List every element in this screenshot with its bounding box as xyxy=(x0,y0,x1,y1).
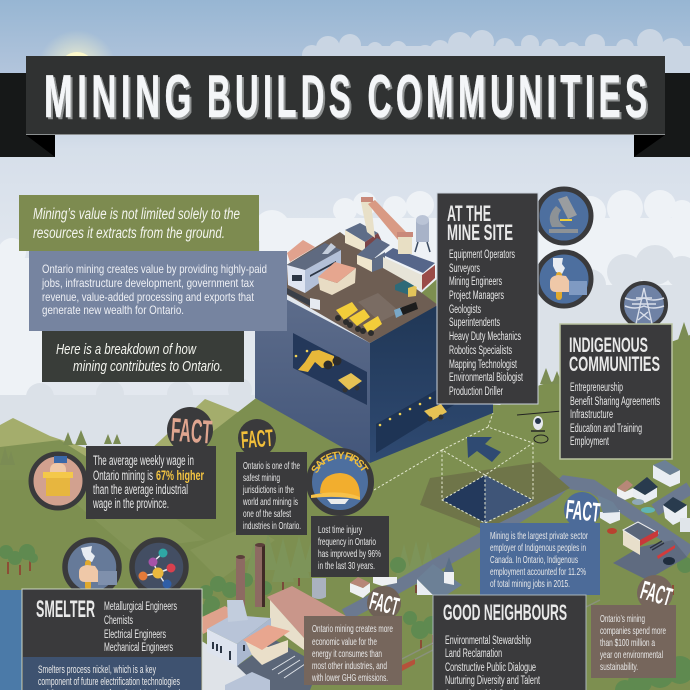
fact badge: sustainability xyxy=(637,575,676,612)
panel: sustainability fact: than $100 million a xyxy=(600,637,655,649)
lower clouds xyxy=(0,190,690,465)
panel: safest industries fact: Ontario is one of the xyxy=(243,460,300,472)
panel: indigenous communities xyxy=(560,324,672,459)
cube top surface xyxy=(262,232,438,343)
panel: energy fact: Ontario mining creates more xyxy=(312,623,393,635)
panel: wage fact xyxy=(86,446,216,519)
panel: good neighbours: GOOD NEIGHBOURS xyxy=(443,600,567,625)
upper clouds xyxy=(284,29,690,80)
house B xyxy=(617,480,633,500)
panel: at the mine site: Project Managers xyxy=(449,290,504,302)
fact badge: safety xyxy=(238,419,276,457)
panel: smelter: Chemists xyxy=(104,615,133,627)
mill buildings xyxy=(345,223,435,290)
icon: safety first hard hat xyxy=(307,448,374,516)
concrete pad xyxy=(358,293,400,322)
panel: safest industries fact: jurisdictions in the xyxy=(242,484,294,496)
arrow xyxy=(467,437,501,462)
icon: microscope xyxy=(537,189,591,243)
panel: safest industries fact xyxy=(236,452,307,535)
road strip xyxy=(200,640,270,690)
panel: breakdown statement xyxy=(42,331,244,382)
panel: wage fact: The average weekly wage in xyxy=(93,453,194,468)
panel: value description: Ontario mining creates value by providing highly-paid xyxy=(42,262,267,276)
panel: at the mine site: Equipment Operators xyxy=(449,249,515,261)
panel: indigenous communities: Infrastructure xyxy=(570,409,613,421)
panel: smelter: Metallurgical Engineers xyxy=(104,601,177,613)
lower tunnel right xyxy=(376,388,470,453)
panel: at the mine site: Surveyors xyxy=(449,263,480,275)
fact badge: indigenous employment: FACT xyxy=(564,494,602,528)
panel: indigenous employment fact: employment accounted for 11.2% xyxy=(490,566,586,578)
white tractor trailer xyxy=(287,288,320,310)
panel: indigenous employment fact: Mining is the largest private sector xyxy=(490,530,588,542)
panel: safest industries fact: industries in Ontario. xyxy=(243,520,301,532)
panel: smelter: SMELTER xyxy=(36,596,95,623)
panel: at the mine site: Mapping Technologist xyxy=(449,359,517,371)
panel: energy fact: most other industries, and xyxy=(312,660,387,672)
panel: safest industries fact: one of the safest xyxy=(243,508,291,520)
panel: smelter: Mechanical Engineers xyxy=(104,642,173,654)
small pink-roof depot xyxy=(318,262,356,295)
small smelter building xyxy=(243,625,290,665)
headframe xyxy=(361,197,413,254)
cube left face xyxy=(255,283,370,463)
panel: at the mine site: MINE SITE xyxy=(447,220,513,245)
text: FACT xyxy=(367,587,402,621)
panel: sustainability fact xyxy=(591,605,676,678)
title text: BUILDS xyxy=(207,63,355,130)
panel: breakdown statement: mining contributes to Ontario. xyxy=(73,358,223,375)
panel: indigenous employment fact: Canada. In Ontario, Indigenous xyxy=(490,554,578,566)
title shadow: MINING xyxy=(46,65,198,132)
panel: wage fact: than the average industrial xyxy=(93,482,188,497)
panel: indigenous employment fact xyxy=(480,523,600,595)
houses xyxy=(312,460,690,599)
icon: transmission tower xyxy=(622,283,666,327)
fact badge: safety: FACT xyxy=(240,425,274,454)
panel: at the mine site xyxy=(437,193,538,404)
panel: value description: generate new wealth for Ontario. xyxy=(42,303,184,317)
panel: good neighbours xyxy=(433,595,586,690)
church xyxy=(417,557,462,596)
fact badge: wage xyxy=(167,407,213,453)
mine cube xyxy=(255,197,493,463)
smelter stacks xyxy=(236,543,265,607)
panel: energy fact: with lower GHG emissions. xyxy=(311,672,388,684)
panel: sustainability fact: sustainability. xyxy=(600,661,638,673)
rail tracks xyxy=(400,600,600,667)
panel: indigenous employment fact: of total mining jobs in 2015. xyxy=(490,578,570,590)
panel: at the mine site: Superintendents xyxy=(449,317,500,329)
panel: indigenous communities: Education and Training xyxy=(570,423,642,435)
sky background xyxy=(0,0,690,440)
icon: hand with wrench xyxy=(537,252,591,306)
sun xyxy=(37,30,117,110)
panel: lost time injury fact: in the last 30 years. xyxy=(318,560,375,572)
panel: at the mine site: Environmental Biologist xyxy=(449,372,523,384)
title text: MINING xyxy=(44,63,196,130)
coal truck xyxy=(394,302,418,318)
house near fact xyxy=(597,495,620,524)
tanker truck xyxy=(395,280,417,297)
title shadow: BUILDS xyxy=(209,65,357,132)
panel: intro statement xyxy=(19,195,259,251)
back hills xyxy=(0,399,260,560)
gas station xyxy=(613,522,687,580)
panel: at the mine site: Production Driller xyxy=(449,386,503,398)
panel: indigenous communities: Entrepreneurship xyxy=(570,382,623,394)
panel: indigenous employment fact: employer of Indigenous peoples in xyxy=(490,542,586,554)
round trees xyxy=(0,544,690,690)
train xyxy=(402,659,415,671)
panel: wage fact: wage in the province. xyxy=(92,496,169,511)
tunnel lights xyxy=(295,350,431,426)
tunnel truck xyxy=(338,373,362,392)
panel: at the mine site: Heavy Duty Mechanics xyxy=(449,331,521,343)
panel: smelter side band xyxy=(0,590,22,690)
title xyxy=(44,63,654,132)
field patches xyxy=(60,490,275,580)
panel: at the mine site: Mining Engineers xyxy=(449,276,502,288)
panel: good neighbours: Nurturing Diversity and Talent xyxy=(445,675,541,687)
lower tunnel left xyxy=(293,333,367,405)
ground xyxy=(0,335,690,690)
panel: wage fact: Ontario mining is xyxy=(93,468,153,483)
icon: molecule xyxy=(132,540,186,594)
title text xyxy=(44,63,652,130)
house D xyxy=(663,497,687,525)
panel: smelter: Electrical Engineers xyxy=(104,629,166,641)
front smelter shed xyxy=(225,672,270,690)
panel: sustainability fact: Ontario’s mining xyxy=(600,613,645,625)
panel: safest industries fact: world and mining is xyxy=(242,496,298,508)
panel: safest industries fact: safest mining xyxy=(243,472,280,484)
smelter complex xyxy=(200,543,346,690)
panel: energy fact: energy it consumes than xyxy=(312,648,382,660)
panel: value description: revenue, value-added processing and exports that xyxy=(42,290,255,304)
panel: at the mine site: Geologists xyxy=(449,304,481,316)
pink building behind office xyxy=(287,240,315,262)
panel: value description: jobs, infrastructure development, government tax xyxy=(41,276,254,290)
fact badge: energy xyxy=(367,586,402,621)
grey tank xyxy=(312,578,326,599)
panel: breakdown statement: Here is a breakdown of how xyxy=(56,341,197,358)
loader xyxy=(298,350,342,372)
panel: indigenous communities: Employment xyxy=(570,436,609,448)
conifer trees xyxy=(0,322,690,593)
panel: lost time injury fact: frequency in Ontario xyxy=(318,536,376,548)
fact badge: indigenous employment xyxy=(564,492,602,528)
left office building xyxy=(287,243,341,293)
parking lot xyxy=(237,640,320,690)
panel: at the mine site: Robotics Specialists xyxy=(449,345,512,357)
panel: good neighbours: Constructive Public Dialogue xyxy=(445,662,536,674)
panel: good neighbours: Land Reclamation xyxy=(445,648,502,660)
panel: at the mine site: AT THE xyxy=(447,201,491,226)
helicopter xyxy=(517,411,562,443)
panel: good neighbours: Environmental Stewardship xyxy=(445,635,531,647)
title shadow xyxy=(46,65,654,132)
panel: lost time injury fact: has improved by 96% xyxy=(318,548,381,560)
panel: value description xyxy=(29,251,287,331)
house C xyxy=(633,477,658,503)
panel: lost time injury fact: Lost time injury xyxy=(318,524,362,536)
panel: intro statement: Mining’s value is not limited solely to the xyxy=(33,206,240,223)
panel: lost time injury fact xyxy=(311,516,389,577)
main smelter building xyxy=(207,600,271,666)
panel: wage fact: 67% higher xyxy=(156,468,204,483)
panel: smelter xyxy=(22,589,202,690)
yellow haul trucks xyxy=(335,302,382,336)
text: FACT xyxy=(170,411,213,450)
panel: energy fact xyxy=(304,616,402,685)
green patch behind mine xyxy=(418,278,438,306)
pit xyxy=(374,413,570,530)
roads xyxy=(345,482,690,615)
panel: smelter: component of future electrification technologies xyxy=(38,676,180,688)
icon: smelter wrench xyxy=(65,540,119,594)
cube right face xyxy=(370,272,493,463)
icon: toolbox xyxy=(31,454,85,508)
cars xyxy=(607,499,655,534)
tunnel truck right xyxy=(424,404,447,422)
village houses xyxy=(350,577,397,598)
pink long roof xyxy=(267,586,346,638)
house A xyxy=(653,460,680,487)
panel: smelter: Smelters process nickel, which is a key xyxy=(38,664,156,676)
panel: energy fact: economic value for the xyxy=(312,636,377,648)
panel: intro statement: resources it extracts from the ground. xyxy=(33,225,225,242)
silo xyxy=(415,215,430,252)
title ribbon xyxy=(0,56,690,157)
icon: safety first hard hat: SAFETY FIRST xyxy=(312,452,369,473)
